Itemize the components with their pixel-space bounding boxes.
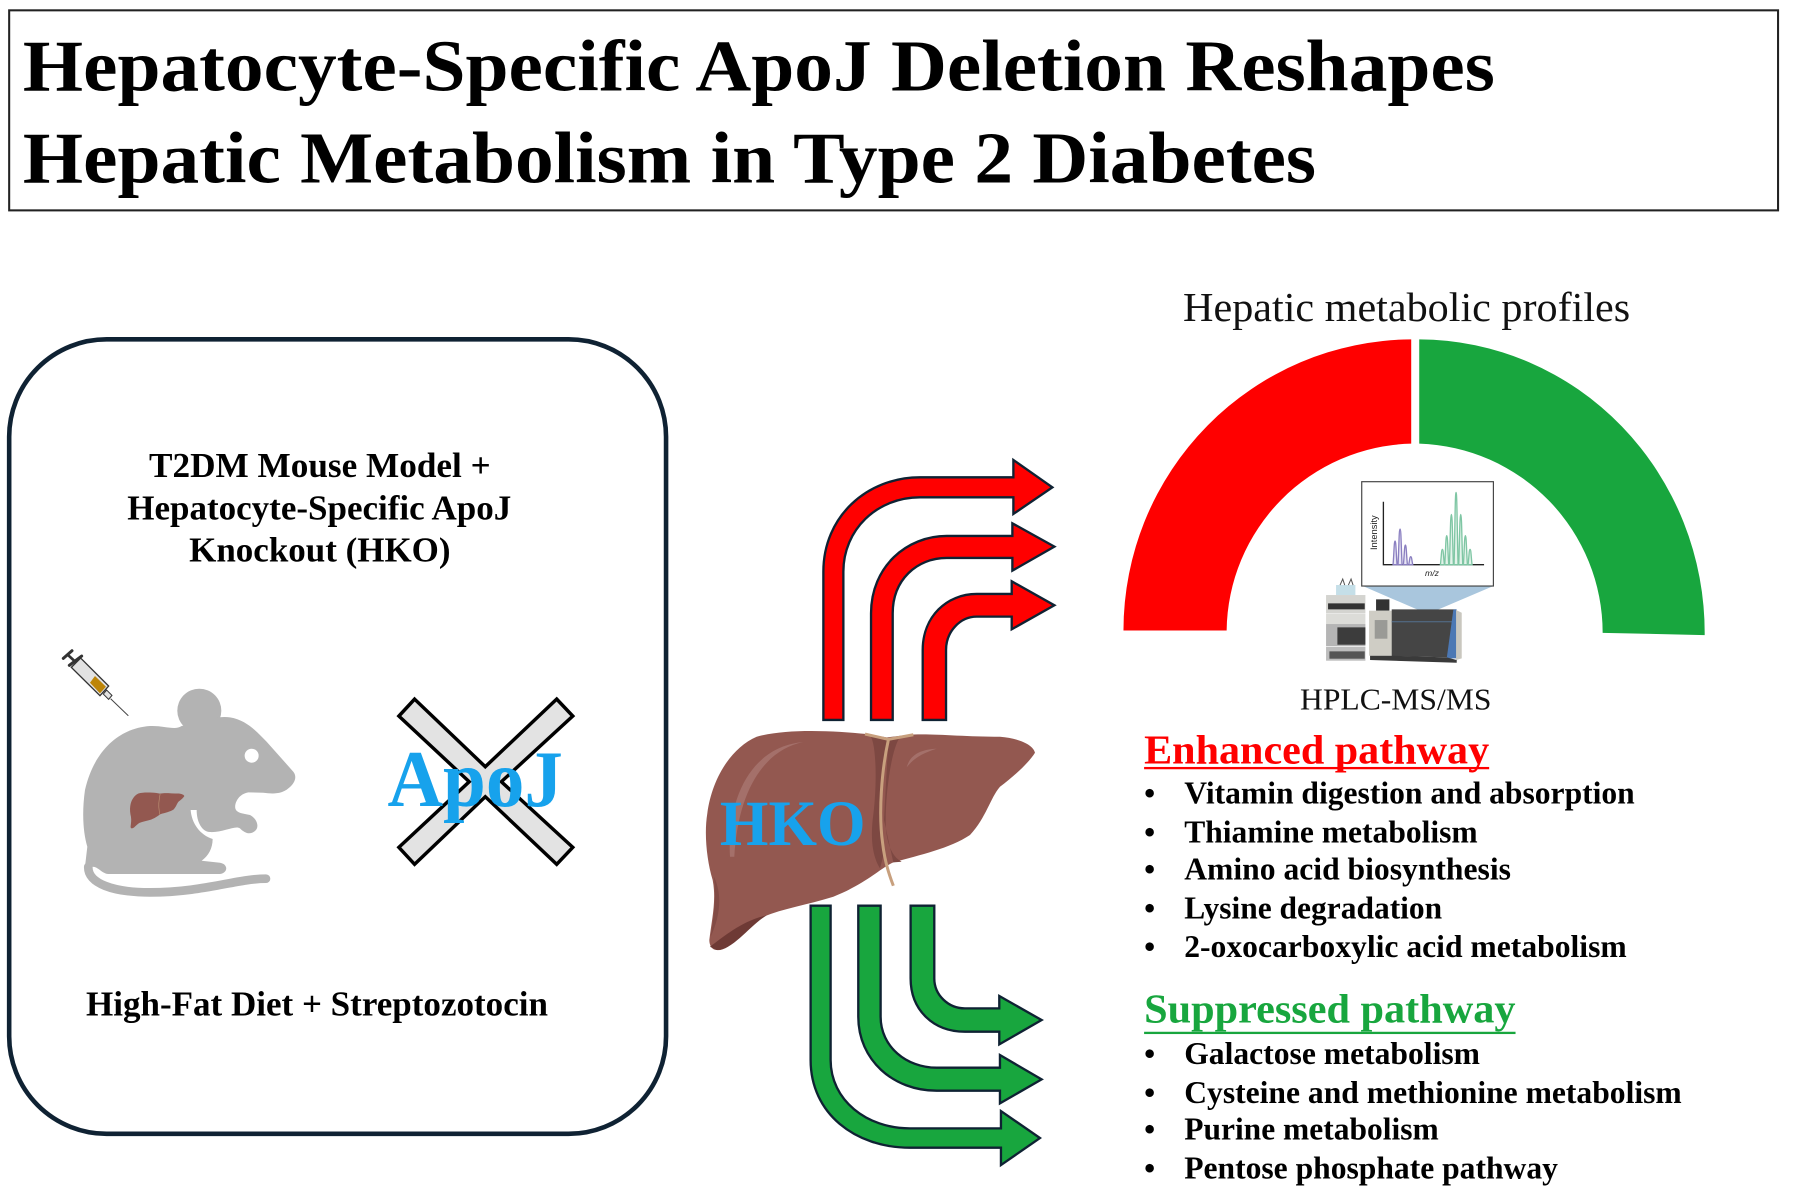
HPLC stack — [1326, 579, 1365, 661]
icon: mouse with liver — [83, 689, 295, 892]
list: suppressed items: • — [1144, 1075, 1155, 1110]
list: suppressed items: • — [1144, 1151, 1155, 1186]
list: enhanced items: Thiamine metabolism — [1184, 815, 1478, 850]
title: Hepatic Metabolism in Type 2 Diabetes — [23, 117, 1316, 198]
icon: liver HKO — [706, 731, 1035, 950]
spectrum panel: m/z — [1425, 568, 1440, 578]
arrow: green outer — [811, 906, 1040, 1165]
arrows: suppressed (green) — [811, 906, 1042, 1165]
list: enhanced items: • — [1144, 929, 1155, 964]
list: suppressed items: • — [1144, 1112, 1155, 1147]
list: enhanced items: Amino acid biosynthesis — [1184, 851, 1511, 886]
gauge: red half — [1123, 339, 1411, 631]
icon: syringe — [63, 651, 128, 716]
arrow: red outer — [823, 460, 1052, 720]
panel: enhanced pathway — [1144, 727, 1635, 964]
lens beam — [1363, 586, 1493, 614]
panel heading: Knockout (HKO) — [189, 532, 451, 570]
title: Hepatocyte-Specific ApoJ Deletion Reshapes — [23, 26, 1495, 107]
list: suppressed items — [1144, 1036, 1682, 1186]
gauge: green half — [1419, 339, 1705, 635]
icon: crossed-out ApoJ: ApoJ — [387, 735, 563, 824]
label: HPLC-MS/MS: HPLC-MS/MS — [1300, 682, 1491, 717]
arrow: green inner — [911, 906, 1042, 1044]
panel: T2DM mouse model — [9, 339, 666, 1134]
icon: liver HKO: HKO — [720, 788, 866, 859]
list: enhanced items: Lysine degradation — [1184, 890, 1443, 925]
chart: half gauge — [1123, 339, 1705, 635]
icon: HPLC-MS/MS instrument — [1326, 482, 1493, 663]
list: enhanced items: • — [1144, 776, 1155, 811]
list: enhanced items: • — [1144, 890, 1155, 925]
arrow: green middle — [858, 906, 1042, 1103]
list: suppressed items: Purine metabolism — [1184, 1112, 1439, 1147]
panel: suppressed pathway — [1144, 986, 1682, 1186]
mass spectrometer — [1369, 599, 1462, 663]
arrows: enhanced (red) — [823, 460, 1054, 720]
spectrum panel — [1362, 482, 1493, 586]
arrow: red inner — [923, 581, 1054, 720]
arrow: red middle — [871, 523, 1054, 720]
panel caption: High-Fat Diet + Streptozotocin — [86, 986, 548, 1024]
title — [9, 10, 1778, 210]
list: enhanced items: Vitamin digestion and absorption — [1184, 776, 1635, 811]
panel heading — [127, 447, 511, 570]
list: suppressed items: • — [1144, 1036, 1155, 1071]
list: suppressed items: Cysteine and methionine metabolism — [1184, 1075, 1682, 1110]
panel heading: T2DM Mouse Model + — [149, 447, 491, 485]
icon: small liver — [130, 793, 184, 828]
heading: suppressed pathway: Suppressed pathway — [1144, 986, 1516, 1032]
list: suppressed items: Galactose metabolism — [1184, 1036, 1480, 1071]
icon: crossed-out ApoJ — [387, 699, 573, 864]
list: suppressed items: Pentose phosphate pathway — [1184, 1151, 1558, 1186]
heading: enhanced pathway: Enhanced pathway — [1144, 727, 1490, 773]
panel heading: Hepatocyte-Specific ApoJ — [127, 489, 511, 527]
spectrum panel: Intensity — [1369, 515, 1379, 550]
list: enhanced items: • — [1144, 815, 1155, 850]
list: enhanced items: 2-oxocarboxylic acid metabolism — [1184, 929, 1627, 964]
heading: hepatic metabolic profiles: Hepatic metabolic profiles — [1183, 284, 1630, 330]
list: enhanced items — [1144, 776, 1635, 964]
list: enhanced items: • — [1144, 851, 1155, 886]
